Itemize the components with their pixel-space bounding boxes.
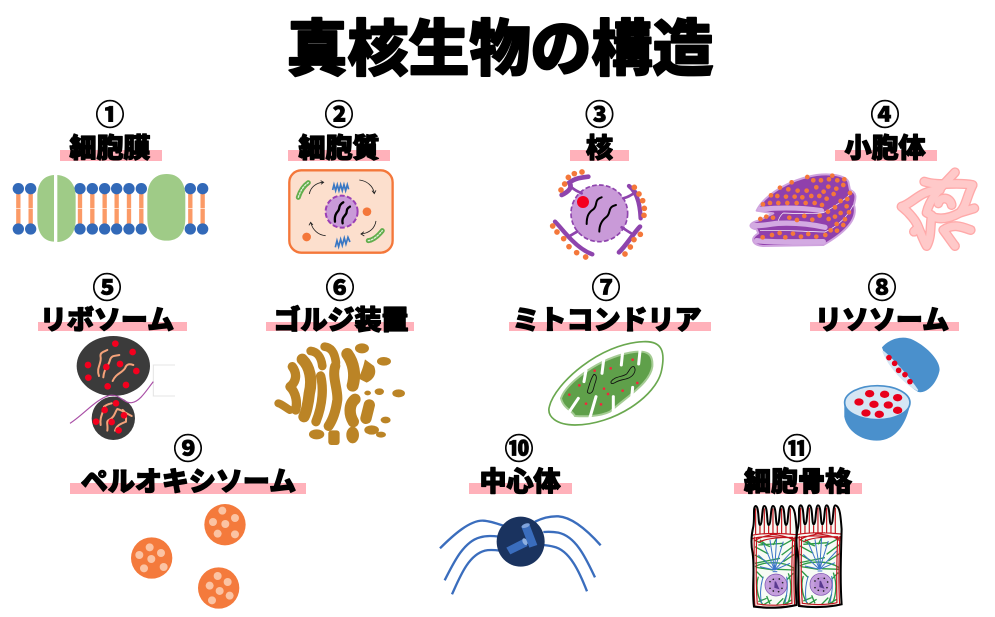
icon: lysosome split open <box>844 338 940 441</box>
heading: peroxisome: ペルオキシソーム <box>81 467 296 497</box>
icon: rough ER <box>750 173 855 246</box>
title: 真核生物の構造 <box>286 15 714 83</box>
number 7: ⑦ <box>591 272 621 305</box>
number 9: ⑨ <box>173 433 203 466</box>
panel: nucleus <box>550 99 647 260</box>
icon: lipid bilayer with proteins <box>13 174 208 242</box>
heading: cytoplasm: 細胞質 <box>298 134 380 164</box>
heading: nucleus: 核 <box>586 134 613 164</box>
number 3: ③ <box>585 99 614 132</box>
icon: smooth ER <box>902 172 974 246</box>
heading: ribosome: リボソーム <box>40 306 174 336</box>
panel: peroxisome <box>70 433 306 609</box>
heading: cytoskeleton: 細胞骨格 <box>744 467 852 497</box>
number 1: ① <box>95 99 125 132</box>
heading: nucleus <box>570 134 629 164</box>
panel: cytoplasm <box>288 99 393 253</box>
panel: cell membrane <box>13 99 208 242</box>
number 10: ⑩ <box>504 433 534 466</box>
heading: Golgi apparatus: ゴルジ装置 <box>274 304 408 336</box>
icon: Golgi stacks <box>278 343 405 445</box>
heading: centrosome: 中心体 <box>480 467 560 497</box>
panel: lysosome <box>810 272 959 441</box>
number 11: ⑪ <box>782 433 812 466</box>
panel: centrosome <box>440 433 601 594</box>
heading: lysosome: リソソーム <box>815 306 949 336</box>
panel: Golgi apparatus <box>266 272 414 445</box>
icon: centrosome with microtubules <box>440 516 601 594</box>
heading: endoplasmic reticulum: 小胞体 <box>844 134 926 164</box>
icon: nucleus with envelope <box>550 169 647 260</box>
number 2: ② <box>324 99 354 132</box>
number 8: ⑧ <box>867 272 897 305</box>
panel: mitochondria <box>509 272 711 425</box>
icon: ribosome subunits <box>70 336 175 440</box>
number 6: ⑥ <box>325 272 355 305</box>
icon: peroxisomes <box>131 504 246 609</box>
heading: mitochondria: ミトコンドリア <box>512 306 702 336</box>
icon: mitochondrion <box>549 342 663 425</box>
panel: ribosome <box>38 272 187 440</box>
icon: cells with cytoskeleton fibres <box>752 505 842 608</box>
number 4: ④ <box>870 99 900 132</box>
icon: cell with organelles <box>289 170 393 253</box>
number 5: ⑤ <box>92 272 122 305</box>
panel: cytoskeleton <box>734 433 862 608</box>
panel: endoplasmic reticulum <box>750 99 974 246</box>
heading: cell membrane: 細胞膜 <box>70 134 150 164</box>
